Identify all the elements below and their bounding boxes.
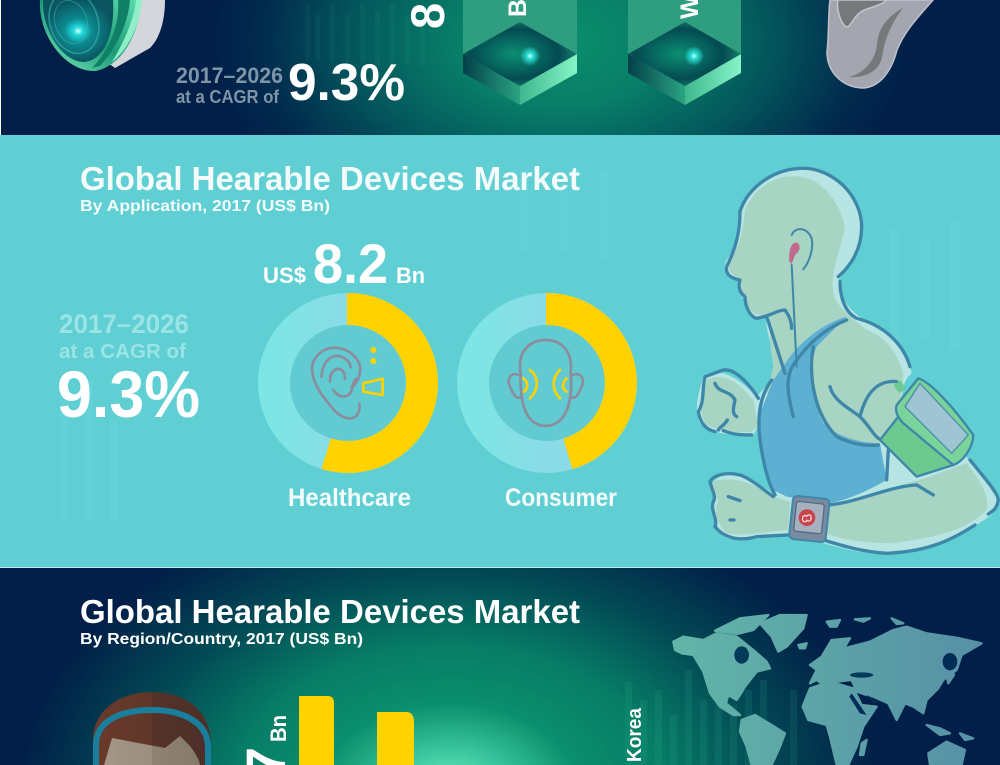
value: region market size: Bn (266, 715, 291, 742)
callout: top CAGR: 9.3% (288, 54, 405, 112)
icon: head with sound waves (509, 340, 583, 426)
panel: market by application (teal band) (0, 135, 1000, 567)
label: consumer: Consumer (505, 484, 617, 512)
callout: top CAGR (176, 54, 405, 112)
heading: region section: By Region/Country, 2017 (US$ Bn) (80, 631, 363, 648)
heading: application section: By Application, 2017 (US$ Bn) (80, 198, 330, 215)
icon: ear with earplug (312, 347, 383, 418)
panel: market by type (top band) (1, 0, 1000, 135)
callout: top CAGR: at a CAGR of (176, 87, 280, 107)
donut chart: consumer (473, 293, 637, 469)
tank top (760, 317, 887, 503)
icon: camera lens earbud (40, 0, 165, 71)
world map (673, 615, 982, 765)
armband (880, 417, 953, 477)
value: application total: 8.2 (313, 232, 388, 295)
label: Korea: Korea (624, 707, 646, 762)
heading: region section: Global Hearable Devices Market (80, 593, 580, 630)
value: application total (263, 232, 425, 295)
chart: isometric column 1 (463, 0, 577, 105)
heading: region section (80, 593, 580, 648)
chart: isometric column 2 (628, 0, 741, 105)
callout: middle CAGR: at a CAGR of (59, 341, 186, 363)
callout: middle CAGR (57, 309, 200, 431)
smartwatch (789, 496, 830, 542)
illustration: runner with hearables (697, 168, 998, 553)
heading: application section (80, 160, 580, 215)
earbud (789, 243, 800, 264)
callout: middle CAGR: 9.3% (57, 357, 200, 431)
panel: market by region (bottom band) (0, 567, 1000, 765)
callout: top CAGR: 2017–2026 (176, 63, 283, 88)
icon: person with headband (93, 692, 211, 765)
value: application total: Bn (396, 263, 425, 288)
value: application total: US$ (263, 263, 306, 288)
donut chart: healthcare (274, 293, 438, 473)
label: healthcare: Healthcare (288, 484, 411, 512)
icon: ear (827, 0, 933, 88)
heading: application section: Global Hearable Devices Market (80, 160, 580, 197)
value: region market size (234, 715, 297, 765)
callout: middle CAGR: 2017–2026 (59, 309, 189, 339)
bar chart: region bars (299, 696, 414, 765)
